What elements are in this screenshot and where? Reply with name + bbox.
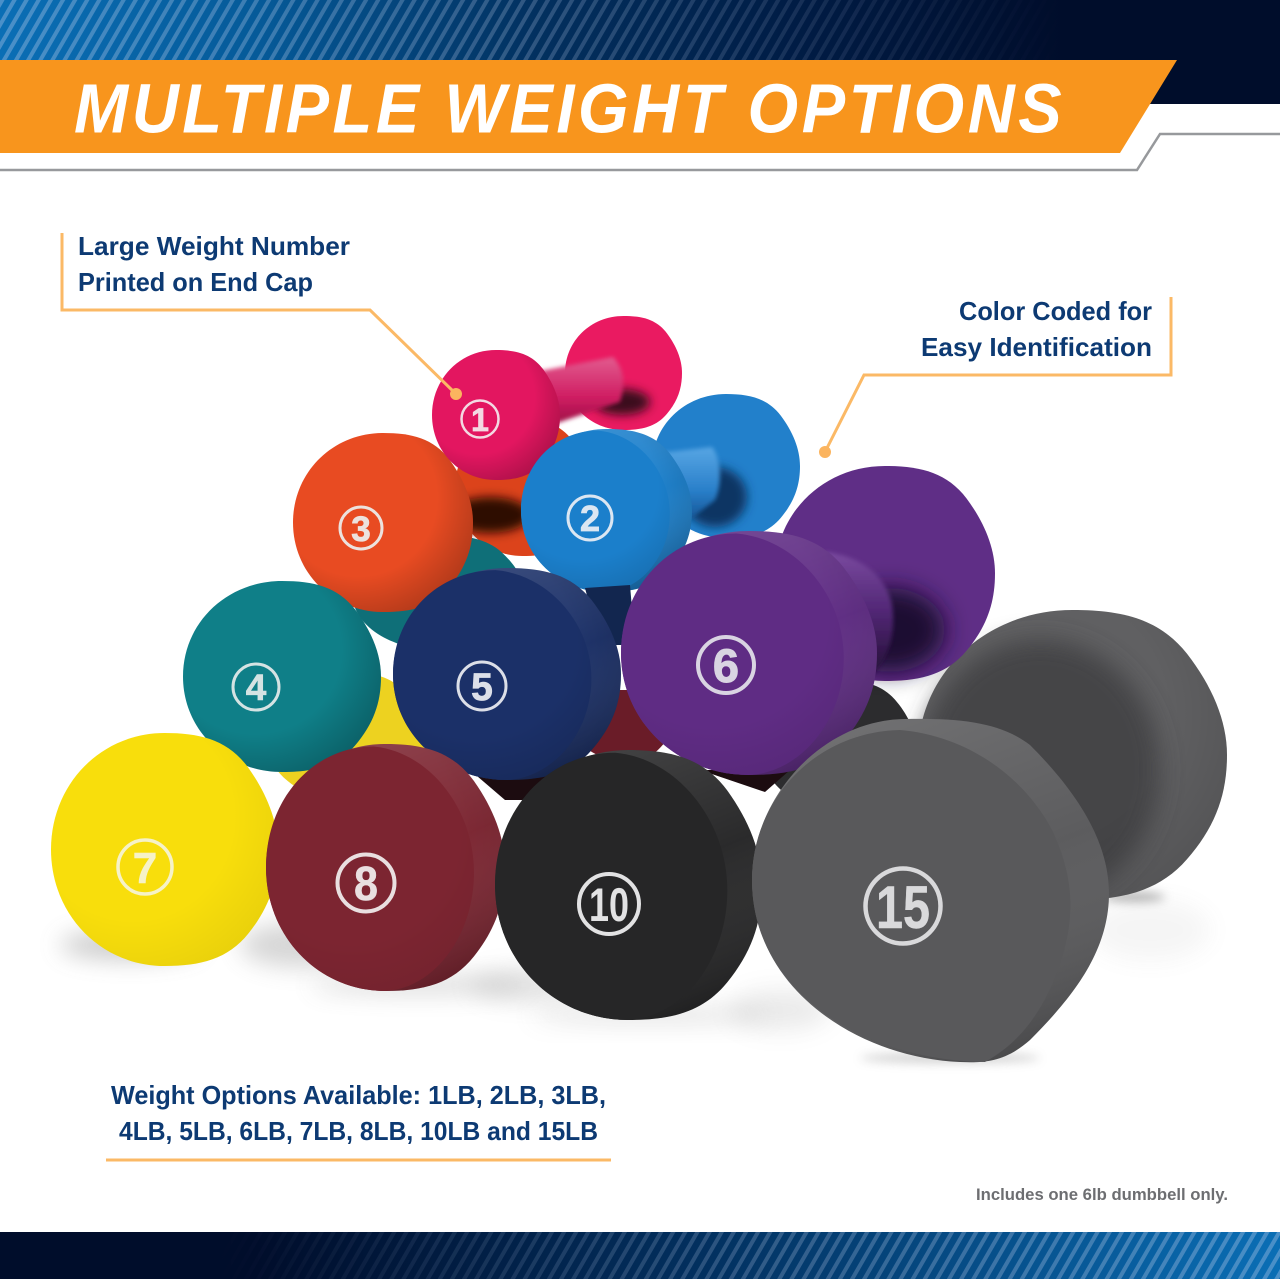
number badge 6 bbox=[698, 637, 754, 693]
number badge 7 bbox=[118, 840, 172, 894]
weight options text: 4LB, 5LB, 6LB, 7LB, 8LB, 10LB and 15LB bbox=[119, 1116, 598, 1146]
callout text bbox=[78, 231, 350, 297]
dumbbell: 3 lb back head and handle bbox=[450, 420, 590, 556]
dumbbell: 2 lb back head bbox=[652, 394, 800, 538]
callout text: Large Weight Number bbox=[78, 231, 350, 261]
dumbbell: 10 lb back head bbox=[760, 680, 915, 810]
dumbbell: 10 lb front head bbox=[495, 750, 762, 1020]
number badge 4: 4 bbox=[246, 667, 267, 708]
header rule line bbox=[0, 134, 1280, 170]
dumbbell: 4 lb back head bbox=[352, 535, 524, 650]
callout text: Easy Identification bbox=[921, 332, 1152, 362]
number badge 2 bbox=[568, 496, 612, 540]
weight options text: Weight Options Available: 1LB, 2LB, 3LB, bbox=[111, 1080, 606, 1110]
number badge 10: 10 bbox=[589, 878, 629, 931]
callout: large weight number bbox=[62, 231, 462, 400]
footer band with diagonal stripes bbox=[0, 1232, 1280, 1279]
dumbbell: 8 lb back head bbox=[575, 690, 670, 760]
number badge 1: 1 bbox=[471, 402, 489, 438]
number badge 7: 7 bbox=[133, 844, 157, 893]
dumbbell: 15 lb back head bbox=[918, 610, 1227, 900]
callout text: Color Coded for bbox=[959, 296, 1152, 326]
callout: color coded bbox=[819, 296, 1171, 458]
number badge 5 bbox=[458, 662, 506, 710]
dumbbell: 7 lb back head bbox=[265, 672, 425, 800]
title text: MULTIPLE WEIGHT OPTIONS bbox=[74, 70, 1062, 148]
number badge 8 bbox=[338, 854, 394, 912]
number badge 15: 15 bbox=[876, 874, 930, 941]
floor shadows bbox=[60, 892, 1210, 1063]
dumbbell: 6 lb front head bbox=[621, 531, 877, 775]
gap shadow between lower heads bbox=[470, 770, 790, 800]
number badge 5: 5 bbox=[471, 666, 493, 709]
callout dot bbox=[450, 388, 462, 400]
dumbbell: 3 lb front head bbox=[293, 433, 473, 612]
title banner bbox=[0, 60, 1177, 153]
number badge 6: 6 bbox=[713, 639, 739, 692]
dumbbell: 1 lb front head bbox=[432, 350, 560, 480]
dumbbell: 6 lb back head and handle bbox=[775, 466, 995, 681]
number badge 3: 3 bbox=[351, 510, 371, 549]
footnote: Includes one 6lb dumbbell only. bbox=[976, 1185, 1228, 1204]
number badge 2: 2 bbox=[580, 498, 600, 539]
header band with diagonal stripes bbox=[0, 0, 1280, 104]
dumbbell: 15 lb front head bbox=[752, 719, 1109, 1062]
weight options text bbox=[111, 1080, 606, 1146]
number badge 8: 8 bbox=[354, 858, 378, 911]
number badge 3 bbox=[340, 507, 382, 549]
dumbbell: 8 lb front head bbox=[266, 744, 505, 991]
callout text: Printed on End Cap bbox=[78, 267, 313, 297]
callout dot bbox=[819, 446, 831, 458]
callout text bbox=[921, 296, 1152, 362]
dumbbell: 2 lb front head and handle bbox=[521, 429, 720, 592]
dumbbell: 5 lb front head bbox=[393, 568, 621, 780]
dumbbell: 1 lb back head and handle bbox=[535, 316, 682, 430]
dumbbell: 5 lb handle shadow bbox=[585, 585, 635, 645]
dumbbell: 4 lb front head bbox=[183, 581, 381, 772]
weight options underline bbox=[106, 1158, 611, 1162]
number badge 4 bbox=[233, 664, 279, 710]
dumbbell: 7 lb front head bbox=[51, 733, 278, 966]
